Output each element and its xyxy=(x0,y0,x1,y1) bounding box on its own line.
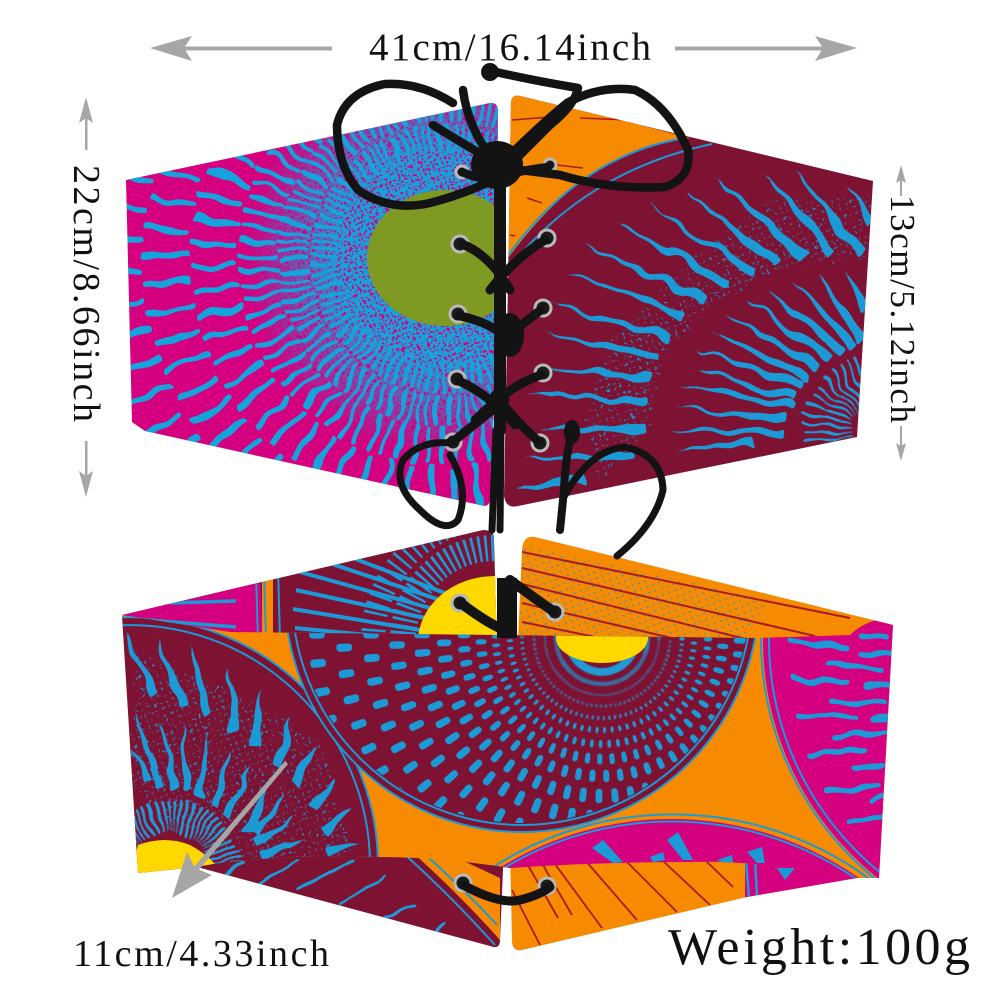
laces: black cord xyxy=(337,63,689,901)
bottom knot on band xyxy=(497,578,517,638)
bottom magenta circle xyxy=(501,819,859,878)
magenta speckle xyxy=(250,104,498,453)
panel: top-right belt half, dark red xyxy=(504,96,873,507)
arrow: left height down xyxy=(79,441,93,497)
arrow: left height up xyxy=(79,97,93,150)
panel: back top-left fold xyxy=(122,530,497,635)
stipple fields xyxy=(585,195,870,482)
panel: front belt band xyxy=(122,615,893,878)
wavy tapered stripes xyxy=(505,165,873,492)
dimension: right height xyxy=(883,165,922,461)
left fan stipple xyxy=(130,650,355,860)
depth label: 11cm/4.33inch xyxy=(73,933,329,975)
arrow: right height up xyxy=(896,165,906,196)
big circle dot rings xyxy=(309,632,746,823)
green half sun xyxy=(367,190,494,326)
weight label: Weight:100g xyxy=(668,919,970,976)
dimension: left height xyxy=(65,97,107,497)
arrow: right height down xyxy=(896,426,906,461)
arrow: width right xyxy=(675,36,857,61)
lower lace xyxy=(463,885,550,901)
arrow: width left xyxy=(150,36,332,61)
eyelets xyxy=(445,159,563,894)
radial blue glow around green sun xyxy=(250,102,498,454)
panel: lower back right flap xyxy=(510,862,857,950)
right magenta waves xyxy=(790,637,892,823)
yellow half sun front left xyxy=(136,840,215,873)
left fan rays xyxy=(123,627,362,861)
width label: 41cm/16.14inch xyxy=(369,26,651,69)
double arc xyxy=(506,138,712,262)
lacing crosses xyxy=(455,240,545,441)
arrow: diagonal depth xyxy=(172,761,288,898)
panel: back top-right fold xyxy=(518,536,893,638)
panel: lower back left flap xyxy=(200,856,503,948)
bottom blue wedges xyxy=(592,832,765,863)
yellow half circle back left xyxy=(418,576,497,635)
panel: top-left belt half, magenta xyxy=(126,102,498,506)
orange corner xyxy=(505,90,690,262)
lower right loop xyxy=(560,425,573,530)
top bow and knots xyxy=(337,70,689,206)
small rays around yellow sun xyxy=(134,799,242,865)
left dark red circle xyxy=(110,617,378,880)
small corner sunburst xyxy=(800,356,861,446)
big dark red circle xyxy=(288,632,754,831)
central vertical cord xyxy=(494,160,506,430)
right height label: 13cm/5.12inch xyxy=(883,195,922,424)
left height label: 22cm/8.66inch xyxy=(65,165,107,422)
radial wavy blue rays xyxy=(126,102,498,506)
right magenta circle xyxy=(763,625,893,878)
title: top width dimension xyxy=(150,26,857,69)
lower left loop xyxy=(400,443,462,526)
yellow half sun front centre xyxy=(556,636,648,663)
